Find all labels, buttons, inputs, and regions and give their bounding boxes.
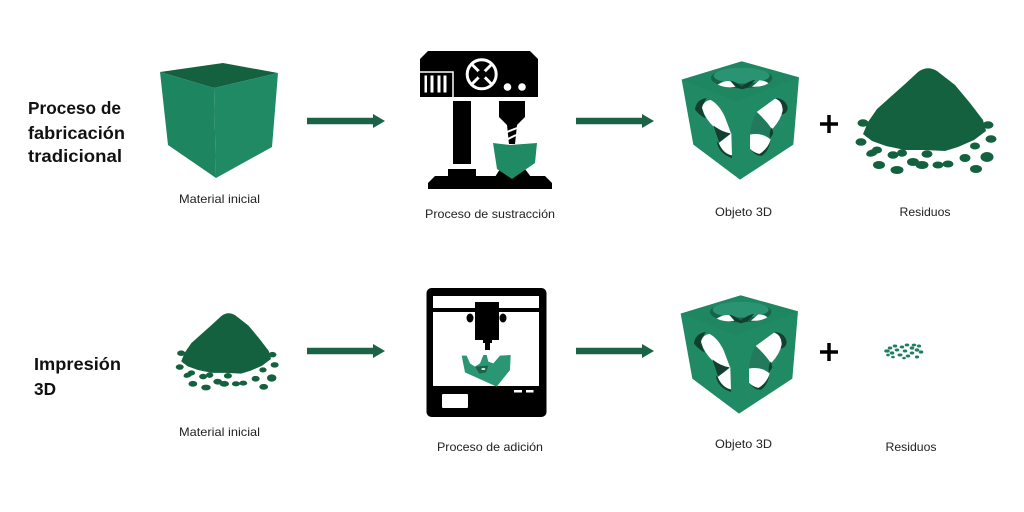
label: Objeto 3D, row 1: Objeto 3D: [715, 205, 772, 219]
icon: solid green cube: [160, 63, 278, 178]
arrow: row 2 to object: [576, 344, 654, 358]
heading: Impresión 3D: [34, 354, 121, 399]
label: Material inicial, row 2: Material inicial: [179, 425, 260, 439]
heading: Impresión 3D: Impresión: [34, 354, 121, 374]
icon: material pile, row 2: [176, 313, 279, 390]
label: Residuos, row 1: Residuos: [900, 205, 950, 219]
icon: 3D object, row 1: [682, 61, 799, 180]
heading: Impresión 3D: 3D: [34, 379, 56, 399]
heading: Proceso de fabricación tradicional: [28, 98, 125, 166]
icon: small residue scatter: [884, 344, 923, 359]
icon: plus, row 1: [820, 115, 838, 133]
heading: Proceso de fabricación tradicional: fabricación: [28, 123, 125, 143]
arrow: row 1 to object: [576, 114, 654, 128]
label: Proceso de adición: Proceso de adición: [437, 440, 543, 454]
label: Residuos, row 2: Residuos: [886, 440, 936, 454]
arrow: row 1 to subtraction: [307, 114, 385, 128]
icon: plus, row 2: [820, 343, 838, 361]
icon: large residue pile: [856, 68, 996, 174]
arrow: row 2 to addition: [307, 344, 385, 358]
icon: 3D object, row 2: [681, 295, 798, 414]
label: Material inicial, row 1: Material inicial: [179, 192, 260, 206]
label: Proceso de sustracción: Proceso de sustracción: [425, 207, 555, 221]
icon: drill press: [420, 51, 552, 189]
label: Objeto 3D, row 2: Objeto 3D: [715, 437, 772, 451]
printed part: [462, 355, 511, 387]
icon: 3D printer: [426, 288, 546, 417]
heading: Proceso de fabricación tradicional: tradicional: [28, 146, 122, 166]
heading: Proceso de fabricación tradicional: Proceso de: [28, 98, 121, 118]
